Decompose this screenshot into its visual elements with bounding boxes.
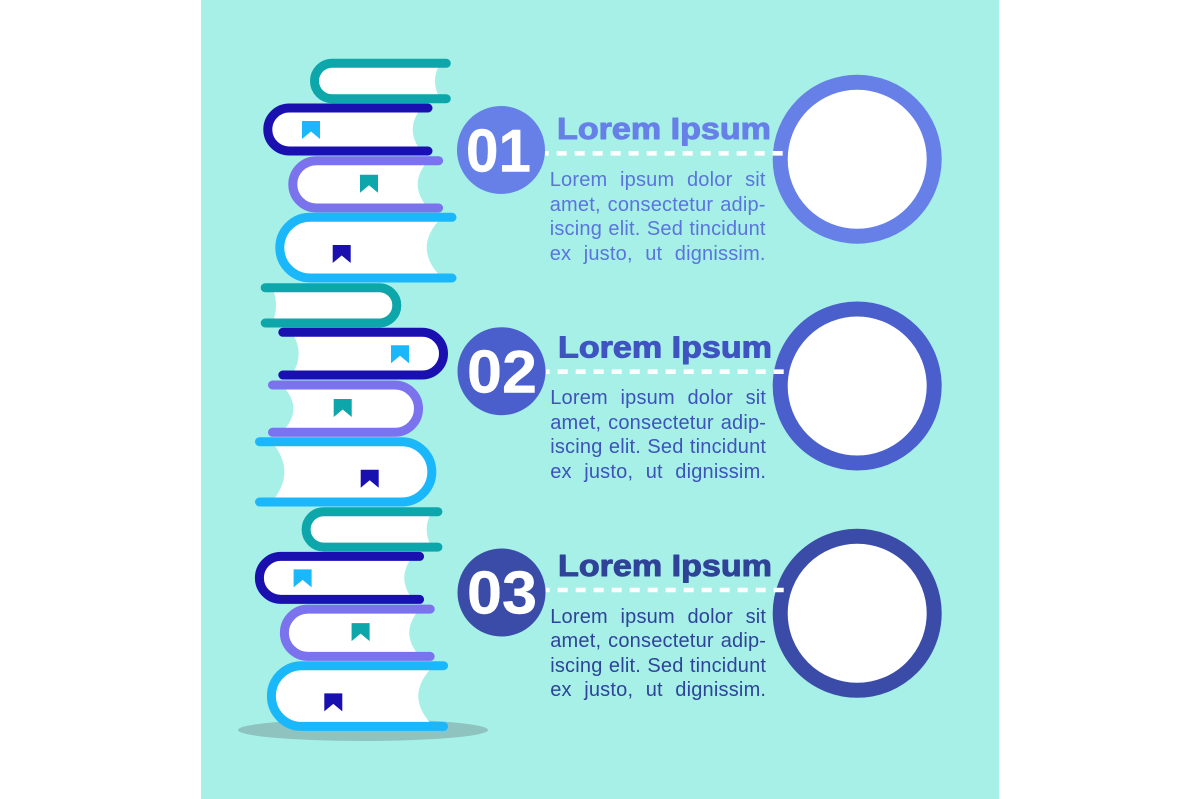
- book stack: group 3: [259, 512, 444, 726]
- book: sky blue: [280, 217, 452, 278]
- book: navy lower: [259, 556, 420, 599]
- background panel: [201, 0, 999, 799]
- body text 01: iscing elit. Sed tincidunt: [550, 218, 766, 240]
- book: teal lower: [306, 512, 438, 547]
- book: teal mirrored: [265, 288, 397, 323]
- heading 01: Lorem Ipsum: [557, 111, 771, 146]
- body text 03: Lorem ipsum dolor sit: [550, 606, 766, 628]
- dashed connector 03: [546, 588, 784, 592]
- panel: step 03: [458, 536, 934, 705]
- dashed connector 02: [546, 369, 784, 374]
- body text 01: Lorem ipsum dolor sit: [550, 169, 766, 191]
- book: purple mirrored: [272, 385, 418, 432]
- book: teal: [315, 63, 446, 99]
- body text 02: amet, consectetur adip-: [550, 412, 766, 434]
- body text 01: ex justo, ut dignissim.: [550, 243, 766, 265]
- book: sky blue lower: [271, 666, 444, 726]
- book: navy: [268, 108, 428, 151]
- heading 03: Lorem Ipsum: [558, 548, 772, 583]
- heading 02: Lorem Ipsum: [558, 330, 772, 365]
- book: navy mirrored: [283, 332, 444, 375]
- body text 02: iscing elit. Sed tincidunt: [550, 436, 766, 458]
- book stack: group 2: [260, 288, 444, 502]
- number badge 02: [458, 327, 546, 415]
- body text 02: Lorem ipsum dolor sit: [550, 387, 766, 409]
- book stack: group 1: [268, 63, 452, 278]
- body text 01: [550, 168, 767, 268]
- number badge 02: 02: [467, 338, 537, 405]
- body text 02: [550, 386, 767, 486]
- ground shadow: [238, 719, 488, 741]
- body text 02: ex justo, ut dignissim.: [550, 461, 766, 483]
- dashed connector 01: [545, 151, 783, 156]
- book: purple lower: [284, 609, 430, 656]
- image placeholder ring 03: [780, 536, 934, 690]
- body text 01: amet, consectetur adip-: [550, 194, 766, 216]
- body text 03: amet, consectetur adip-: [550, 630, 766, 652]
- number badge 01: [457, 106, 545, 194]
- number badge 03: [458, 548, 546, 636]
- body text 03: ex justo, ut dignissim.: [550, 679, 766, 701]
- book: sky blue mirrored: [260, 442, 432, 502]
- panel: step 02: [458, 309, 934, 486]
- body text 03: [550, 605, 767, 705]
- book: purple: [293, 161, 439, 208]
- image placeholder ring 01: [780, 82, 934, 236]
- number badge 03: 03: [467, 560, 537, 627]
- number badge 01: 01: [466, 118, 531, 185]
- image placeholder ring 02: [780, 309, 934, 463]
- panel: step 01: [457, 82, 934, 268]
- body text 03: iscing elit. Sed tincidunt: [550, 655, 766, 677]
